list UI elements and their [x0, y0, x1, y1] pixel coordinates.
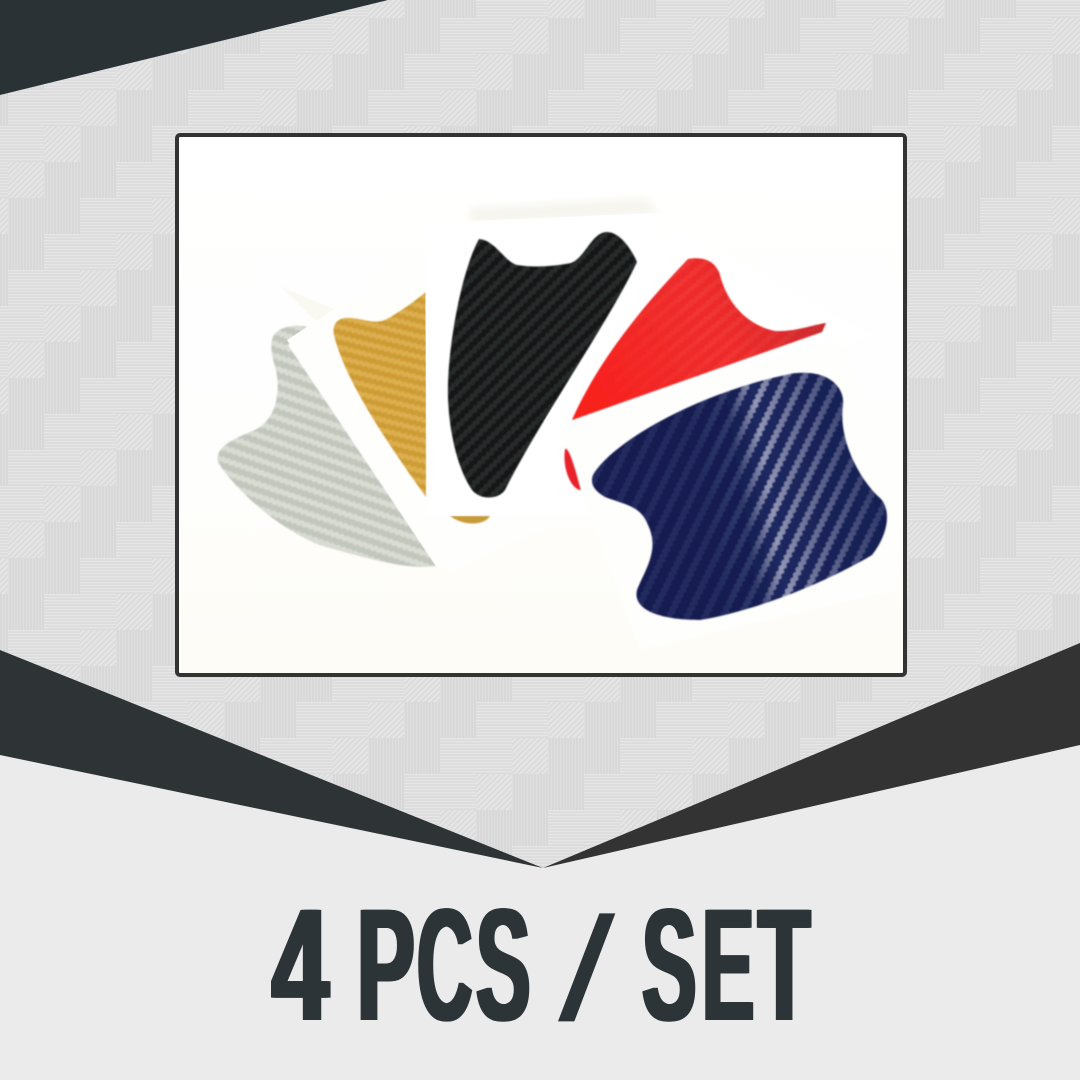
title: 4 PCS / SET: C: [416, 875, 472, 1054]
paper: navy sticker backing: [558, 338, 905, 650]
paper: red sticker backing: [522, 224, 870, 478]
title: 4 PCS / SET: P: [357, 875, 415, 1054]
paper: black sticker backing: [425, 213, 661, 516]
photo background: [177, 135, 905, 675]
paper: gold sticker backing: [287, 250, 560, 572]
sticker papers and soft shadows: [280, 198, 660, 325]
title: 4 PCS / SET: S: [642, 875, 696, 1054]
sticker: red corner peeking out: [564, 449, 581, 490]
title: 4 PCS / SET: E: [702, 875, 754, 1054]
title: 4 PCS / SET: T: [758, 875, 810, 1054]
left dark chevron band: [0, 650, 543, 868]
title: 4 PCS / SET: S: [476, 875, 531, 1054]
sticker: red: [572, 258, 826, 420]
sticker: black: [448, 232, 637, 498]
top left dark corner banner: [0, 0, 388, 95]
sticker: navy: [592, 373, 887, 620]
photo frame: [177, 135, 905, 675]
title: 4 PCS / SET: [271, 875, 812, 1054]
title: 4 PCS / SET: /: [558, 887, 615, 1051]
product photo panel: [177, 135, 905, 675]
sticker: gold: [334, 292, 490, 524]
title: 4 PCS / SET: 4: [272, 875, 328, 1054]
sticker: silver: [218, 326, 436, 567]
bottom light panel: [0, 745, 1080, 1080]
right dark chevron band: [543, 643, 1080, 868]
